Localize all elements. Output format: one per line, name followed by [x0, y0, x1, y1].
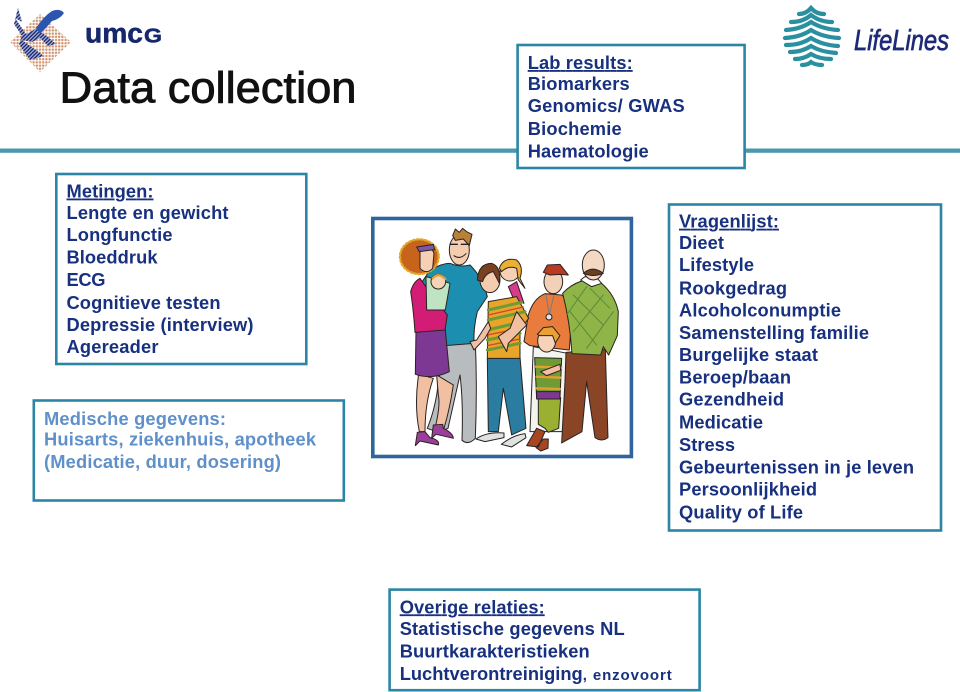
- panel: Medische gegevens: [34, 400, 344, 500]
- logo: LifeLines: [785, 8, 949, 65]
- wordmark letter G: G: [144, 25, 162, 48]
- figure: man in teal sweater: [413, 228, 487, 443]
- text: Metingen list: Bloeddruk: [66, 247, 158, 268]
- panel: Vragenlijst: [669, 204, 941, 530]
- figure: grandfather: [562, 250, 618, 443]
- text: Vragenlijst list: Gebeurtenissen in je leven: [679, 456, 914, 477]
- text: Vragenlijst list: [679, 211, 914, 522]
- text: Metingen list: [66, 180, 254, 357]
- text: Lab results: Genomics/ GWAS: [528, 95, 685, 116]
- panel: Overige relaties: [390, 590, 700, 690]
- icon: frog on halftone diamond: [10, 8, 71, 72]
- text: Vragenlijst list: Stress: [679, 434, 735, 455]
- text: Lab results: Biomarkers: [528, 73, 630, 94]
- text: Vragenlijst list: Beroep/baan: [679, 366, 791, 387]
- text: Overige relaties: [400, 596, 672, 684]
- text: Vragenlijst list: Persoonlijkheid: [679, 478, 817, 499]
- text: Vragenlijst list: Rookgedrag: [679, 277, 787, 298]
- logo: UMCG: [10, 8, 143, 72]
- title: Data collection: [60, 64, 356, 113]
- text: Vragenlijst list: Gezendheid: [679, 389, 784, 410]
- text: Vragenlijst list: Alcoholconumptie: [679, 300, 841, 321]
- text: Vragenlijst list: Dieet: [679, 232, 724, 253]
- text: Metingen list: ECG: [66, 269, 106, 290]
- panel: family illustration: [373, 218, 631, 456]
- text: Vragenlijst list: Vragenlijst:: [679, 211, 779, 232]
- text: Metingen list: Depressie (interview): [66, 314, 254, 335]
- figure: woman with baby: [400, 239, 453, 446]
- icon: wave dome: [785, 8, 839, 65]
- header rule: [0, 148, 960, 153]
- figure: young child: [527, 327, 562, 451]
- text: Overige relaties: Luchtverontreiniging: [400, 663, 583, 684]
- text: Medische gegevens: Medische gegevens:: [44, 408, 226, 429]
- text: Lab results: [528, 52, 685, 162]
- figure: grandmother: [524, 264, 572, 432]
- text: Metingen list: Longfunctie: [66, 224, 172, 245]
- figure: teenage boy carrying girl: [470, 259, 529, 447]
- text: Metingen list: Agereader: [66, 336, 158, 357]
- text: Vragenlijst list: Quality of Life: [679, 501, 803, 522]
- text: Lab results: Biochemie: [528, 118, 622, 139]
- text: Medische gegevens: (Medicatie, duur, dosering): [44, 451, 281, 472]
- text: Vragenlijst list: Burgelijke staat: [679, 344, 818, 365]
- text: Overige relaties: Overige relaties:: [400, 596, 545, 617]
- text: Overige relaties: , enzovoort: [583, 667, 672, 684]
- text: Medische gegevens: [44, 408, 317, 472]
- text: Overige relaties: Statistische gegevens NL: [400, 618, 625, 639]
- text: Metingen list: Metingen:: [66, 180, 154, 202]
- panel: Metingen: [56, 174, 306, 364]
- text: Vragenlijst list: Lifestyle: [679, 254, 754, 275]
- text: Vragenlijst list: Medicatie: [679, 411, 763, 432]
- wordmark: umcg: umc: [85, 18, 143, 49]
- text: Lab results: Haematologie: [528, 141, 649, 162]
- text: Metingen list: Lengte en gewicht: [66, 202, 228, 223]
- text: Overige relaties: Buurtkarakteristieken: [400, 640, 590, 661]
- illustration: family group: [400, 228, 618, 451]
- text: Lab results: Lab results:: [528, 52, 633, 73]
- panel: Lab results: [518, 45, 745, 168]
- text: Medische gegevens: Huisarts, ziekenhuis, apotheek: [44, 429, 317, 450]
- text: Vragenlijst list: Samenstelling familie: [679, 322, 869, 343]
- text: Metingen list: Cognitieve testen: [66, 292, 220, 313]
